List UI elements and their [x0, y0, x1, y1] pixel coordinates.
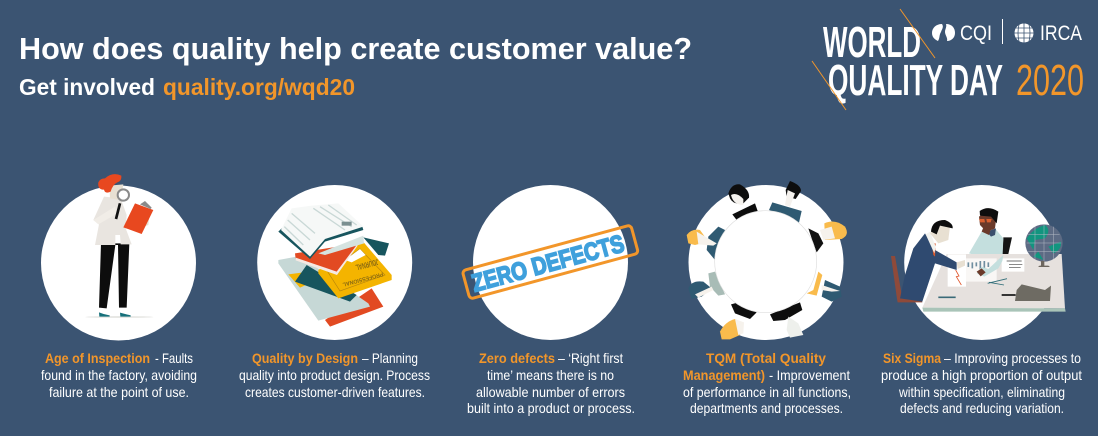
- icon: inspector with magnifying glass and clipboard: [85, 174, 153, 318]
- text block: TQM: - Improvement: [769, 367, 850, 383]
- text block: TQM: [683, 350, 851, 416]
- text block: Quality by Design: Quality by Design: [252, 350, 358, 366]
- circle 4: [688, 185, 844, 340]
- text block: TQM: of performance in all functions,: [683, 384, 851, 400]
- circle 5: [904, 185, 1059, 340]
- text block: TQM: TQM (Total Quality: [706, 350, 826, 366]
- text block: Quality by Design: creates customer-driven features.: [245, 384, 425, 400]
- icon: stack of books and journals: JOURNAL: [355, 257, 380, 273]
- subtitle with link: [19, 74, 355, 100]
- text block: Six Sigma: defects and reducing variation.: [900, 400, 1064, 416]
- text block: Age of Inspection: [41, 350, 197, 400]
- panel: TQM: [687, 181, 847, 340]
- text block: Quality by Design: [239, 350, 430, 400]
- text block: TQM: Management): [683, 367, 765, 383]
- icon: stack of books and journals: PROFESSIONAL: [341, 270, 384, 287]
- text block: Six Sigma: produce a high proportion of output: [881, 367, 1082, 383]
- text block: Age of Inspection: - Faults: [155, 350, 193, 366]
- logo: World Quality Day 2020 with CQI and IRCA: IRCA: [1040, 22, 1082, 45]
- icon: two men at a desk with globe: [891, 208, 1066, 312]
- text block: Age of Inspection: found in the factory, avoiding: [41, 367, 197, 383]
- panel: Zero defects: [462, 185, 639, 340]
- text block: Six Sigma: within specification, eliminating: [898, 384, 1065, 400]
- text block: Quality by Design: quality into product design. Process: [239, 367, 430, 383]
- circle 3: [473, 185, 628, 340]
- subtitle with link: quality.org/wqd20: [163, 74, 355, 100]
- text block: Age of Inspection: failure at the point of use.: [49, 384, 189, 400]
- logo: World Quality Day 2020 with CQI and IRCA: [812, 9, 1084, 110]
- text block: Quality by Design: – Planning: [362, 350, 418, 366]
- text block: Zero defects: [467, 350, 635, 416]
- panel: Quality by Design: [257, 185, 412, 340]
- title: How does quality help create customer value?: [19, 31, 692, 66]
- icon: people around a table: [687, 181, 847, 339]
- text block: Age of Inspection: Age of Inspection: [45, 350, 150, 366]
- logo: World Quality Day 2020 with CQI and IRCA: WORLD: [823, 18, 921, 67]
- circle 1: [41, 186, 196, 340]
- circle 2: [257, 185, 412, 340]
- subtitle with link: Get involved: [19, 74, 155, 100]
- icon: zero defects stamp: ZERO DEFECTS: [469, 231, 627, 298]
- text block: Zero defects: built into a product or process.: [467, 400, 635, 416]
- text block: TQM: departments and processes.: [690, 400, 843, 416]
- icon: stack of books and journals: [278, 203, 392, 327]
- panel: Age of Inspection: [41, 174, 196, 340]
- text block: Zero defects: allowable number of errors: [476, 384, 625, 400]
- text block: Zero defects: time’ means there is no: [487, 367, 614, 383]
- logo: World Quality Day 2020 with CQI and IRCA: CQI: [960, 22, 992, 45]
- panel: Six Sigma: [891, 185, 1066, 340]
- text block: Six Sigma: [881, 350, 1082, 416]
- text block: Six Sigma: Six Sigma: [883, 350, 941, 366]
- text block: Zero defects: – ‘Right first: [558, 350, 623, 366]
- text block: Six Sigma: – Improving processes to: [944, 350, 1081, 366]
- text block: Zero defects: Zero defects: [479, 350, 555, 366]
